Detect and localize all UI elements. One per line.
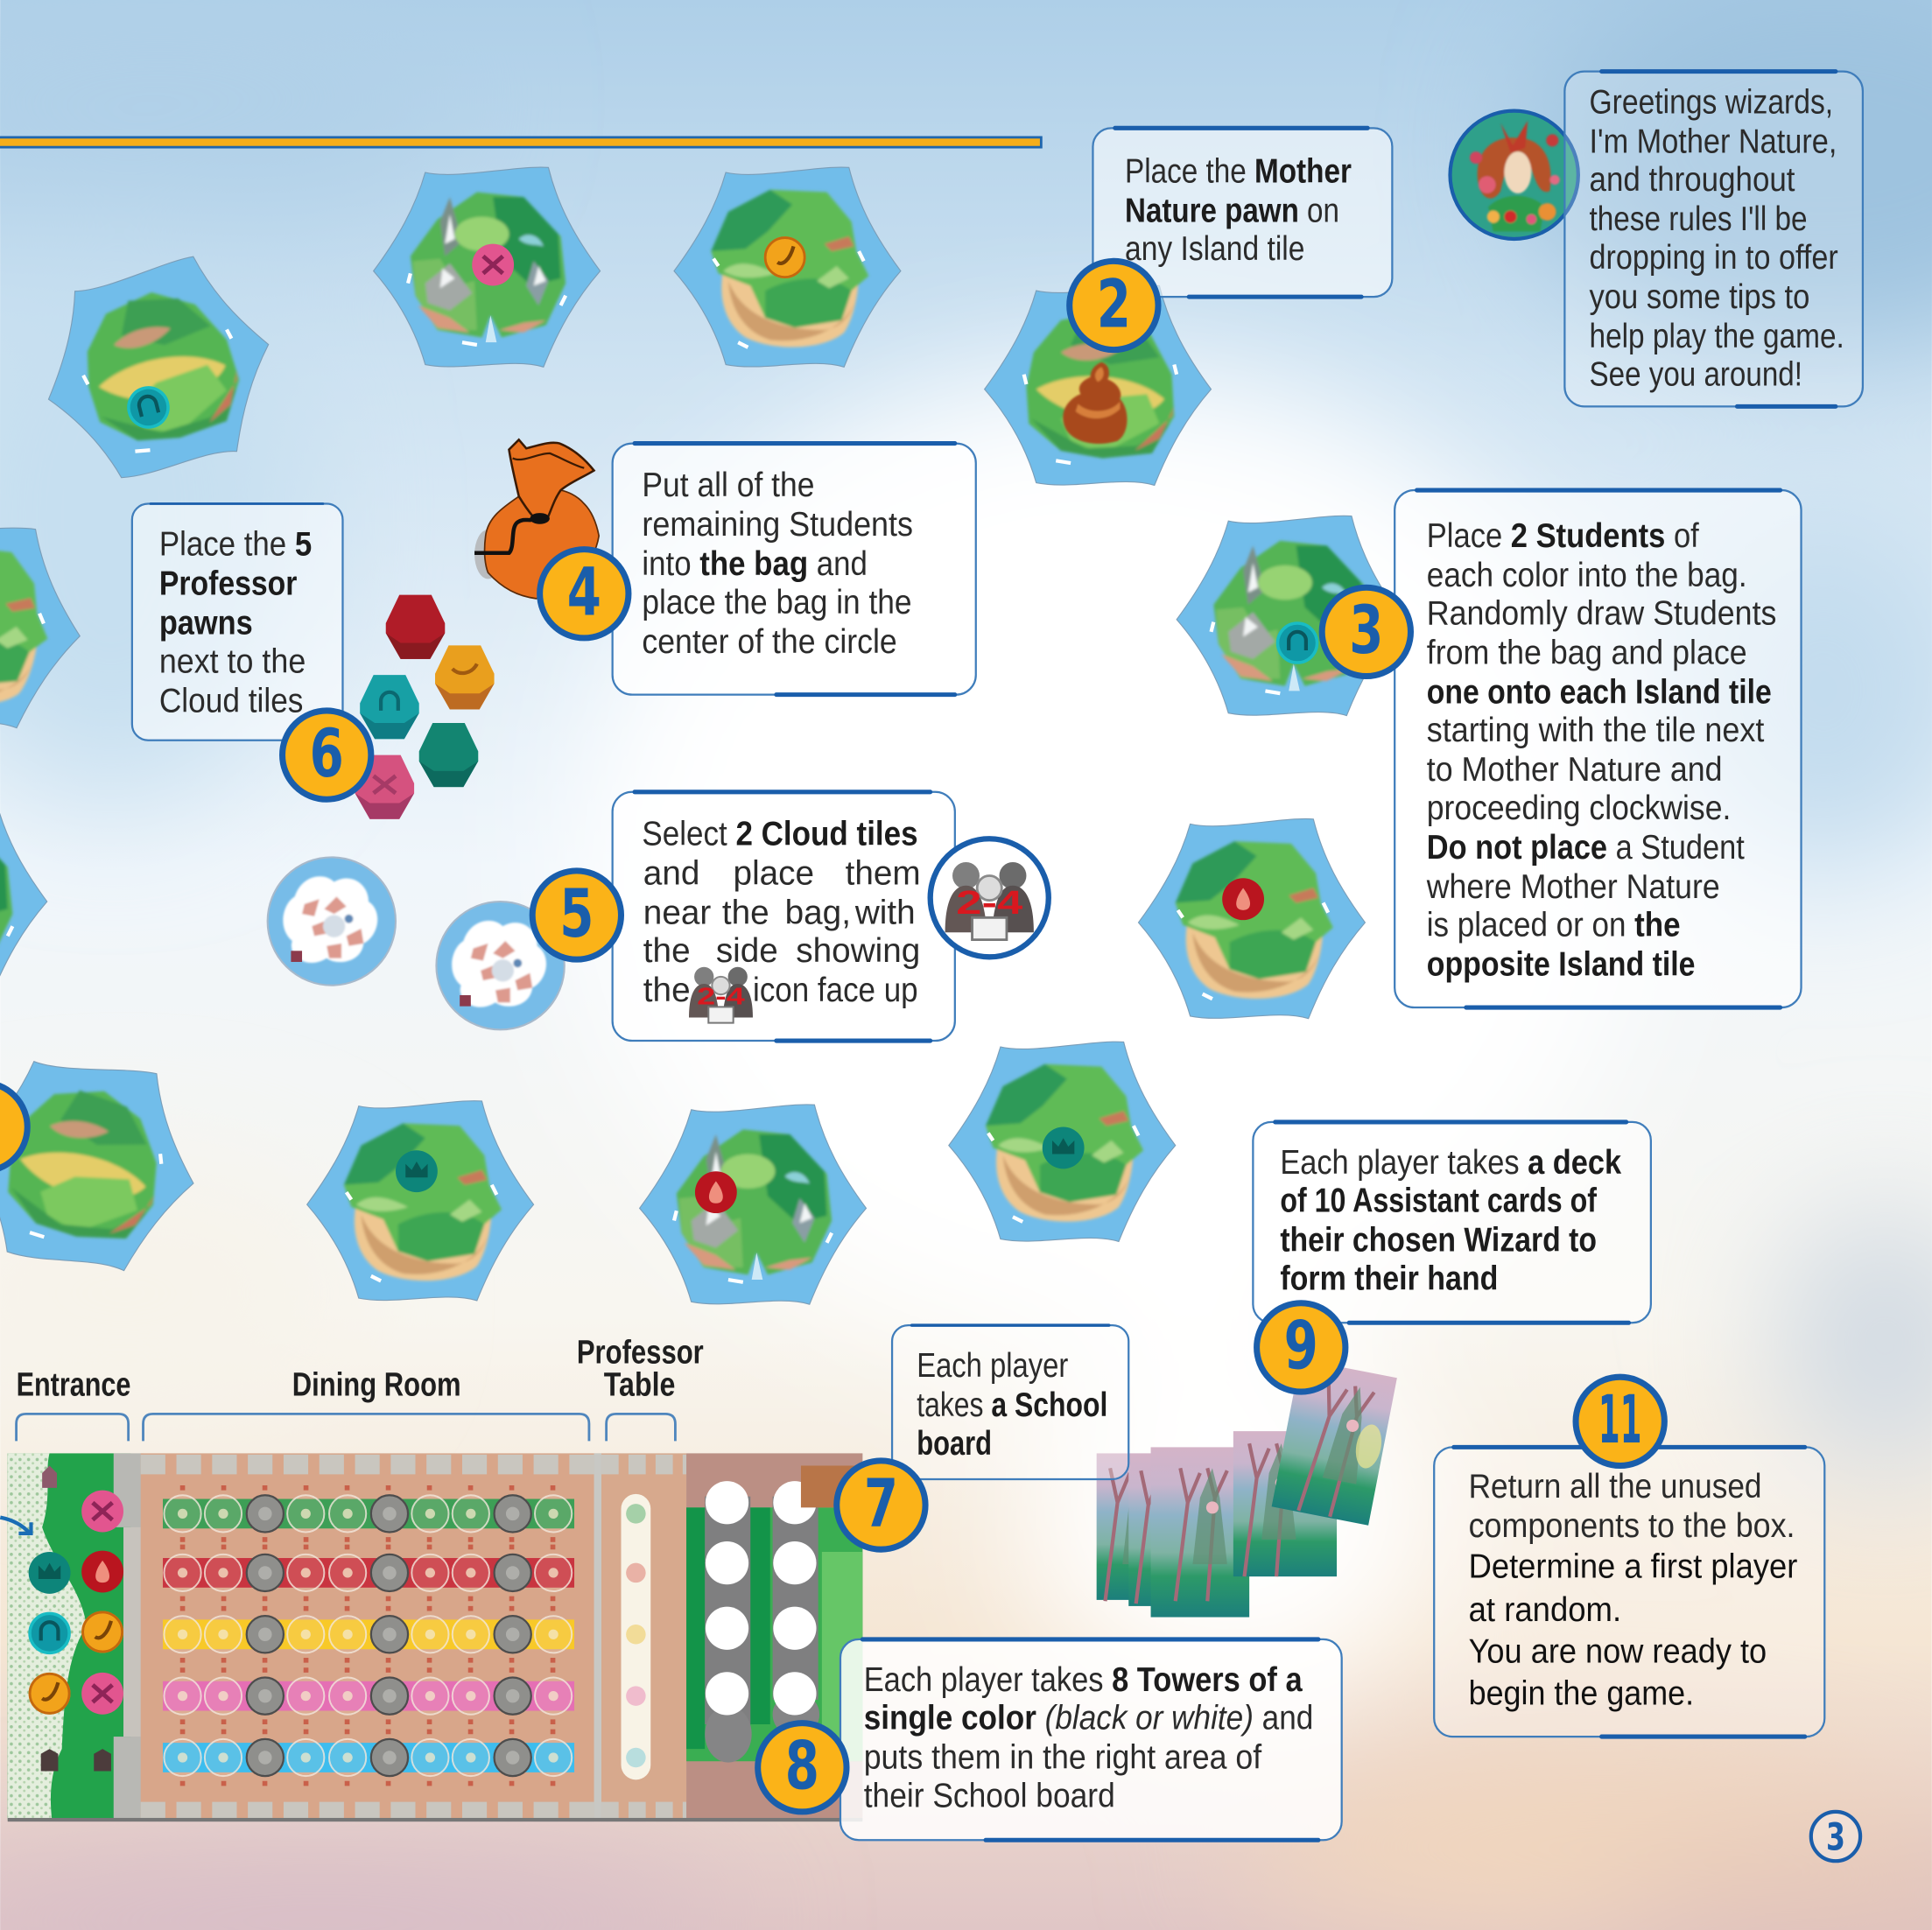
page number (1811, 1812, 1860, 1861)
professor pawns (355, 595, 495, 819)
board: Professor Table (594, 1453, 686, 1821)
callout: step 2: any Island tile (1125, 230, 1304, 268)
step badge: 7 (837, 1461, 925, 1549)
icon: Mother Nature pawn (1063, 362, 1128, 444)
callout: step 3: one onto each Island tile (1427, 673, 1772, 711)
step badge: 7: 7 (864, 1464, 898, 1542)
callout: step 3: starting with the tile next (1427, 712, 1765, 749)
board section labels (17, 1335, 704, 1403)
label: Professor Table: Table (604, 1366, 675, 1403)
callout: Mother Nature greeting: Greetings wizards, (1590, 83, 1833, 121)
island tile: red student, bottom (640, 1105, 867, 1304)
callout: step 5: them (846, 854, 921, 892)
portrait: Mother Nature (1451, 111, 1578, 239)
callout: step 5: the (643, 972, 691, 1009)
island tile: teal student, step 3 (1177, 516, 1403, 716)
callout: step 5: near (643, 894, 711, 931)
callout: Mother Nature greeting: See you around! (1590, 355, 1802, 393)
island tile: partial at left edge upper (0, 516, 88, 732)
callout: step 7: board (917, 1425, 992, 1463)
pawn: red (386, 595, 445, 659)
callout: Mother Nature greeting: help play the game. (1590, 318, 1844, 355)
callout: step 4: center of the circle (642, 623, 897, 661)
callout: step 4: place the bag in the (642, 584, 912, 621)
callout: step 5: side (716, 932, 778, 970)
callout: step 5: icon face up (753, 972, 918, 1009)
step badge: 4 (540, 550, 629, 638)
step badge: 2: 2 (1097, 265, 1131, 342)
pawn: orange (435, 645, 495, 710)
white towers (706, 1481, 817, 1715)
step badge: 6: 6 (310, 714, 344, 792)
callout: step 8: puts them in the right area of (864, 1739, 1261, 1777)
callout: step 4: remaining Students (642, 506, 913, 544)
callout: step 9: Each player takes a deck (1280, 1144, 1622, 1182)
step badge: 9: 9 (1284, 1307, 1318, 1385)
callout: step 3 (1395, 490, 1802, 1007)
callout: step 6: Place the 5 (159, 526, 312, 564)
step badge: 11 (1576, 1377, 1664, 1466)
callout: step 11 (1434, 1447, 1824, 1737)
callout: Mother Nature greeting: dropping in to offer (1590, 239, 1838, 277)
cloud tile: right (436, 902, 565, 1029)
callout: step 6: pawns (159, 605, 253, 642)
decorative title rule (0, 136, 1043, 149)
callout: step 11: You are now ready to (1469, 1633, 1767, 1671)
label: Dining Room: Dining Room (292, 1366, 461, 1403)
step badge: 8: 8 (785, 1727, 819, 1805)
callout: step 3: is placed or on the (1427, 906, 1681, 944)
callout: step 4: into the bag and (642, 545, 868, 583)
callout: step 5: with (854, 894, 916, 931)
callout: step 7: takes a School (917, 1386, 1107, 1424)
callout: step 3: where Mother Nature (1426, 868, 1720, 906)
callout: step 5: bag, (785, 894, 851, 931)
icon: student bag (474, 439, 599, 599)
callout: step 9 (1253, 1122, 1651, 1323)
arrow into entrance (0, 1518, 31, 1533)
island tile: red student (1139, 818, 1365, 1019)
callout: Mother Nature greeting: you some tips to (1590, 278, 1809, 316)
Assistant cards (1097, 1359, 1397, 1618)
island tile: teal student (24, 244, 292, 493)
island tile with Mother Nature pawn (985, 285, 1212, 485)
callout: step 6: next to the (159, 642, 306, 680)
callout: step 9: form their hand (1280, 1260, 1498, 1297)
callout: step 5: Select 2 Cloud tiles (642, 815, 918, 853)
island tile: pink student (374, 167, 601, 367)
step badge: 9 (1257, 1303, 1345, 1392)
icon: 2-4 players (931, 839, 1049, 957)
callout: Mother Nature greeting: these rules I'll be (1590, 200, 1808, 238)
step badge: 5 (532, 871, 621, 959)
callout: step 11: begin the game. (1469, 1674, 1694, 1712)
cloud tile: left (268, 857, 396, 986)
pawn: teal (360, 675, 419, 739)
board: Tower area (686, 1453, 862, 1821)
token (81, 1491, 123, 1532)
callout: step 6: Cloud tiles (159, 682, 303, 719)
callout: step 8: single color (black or white) and (864, 1700, 1313, 1737)
callout: step 3: opposite Island tile (1427, 945, 1696, 983)
callout: step 4: Put all of the (642, 467, 814, 504)
callout: step 2: Nature pawn on (1125, 192, 1339, 229)
callout: step 8: their School board (864, 1777, 1115, 1814)
callout: step 7: Each player (917, 1347, 1068, 1385)
step badge: 5: 5 (559, 874, 594, 952)
callout: step 2: Place the Mother (1125, 152, 1352, 190)
callout: Mother Nature greeting: I'm Mother Nature, (1590, 123, 1837, 160)
callout: step 3: proceeding clockwise. (1427, 790, 1731, 827)
callout: step 5: the (722, 894, 769, 931)
callout: step 11: components to the box. (1469, 1507, 1795, 1545)
School board (0, 1453, 862, 1821)
island tile: bottom left (0, 1049, 207, 1279)
callout: step 6: Professor (159, 565, 297, 603)
callout: step 3: Do not place a Student (1427, 829, 1745, 867)
callout: step 11: at random. (1469, 1591, 1621, 1629)
island tile: partial at left edge lower (0, 798, 47, 998)
step badge: 1 partial (0, 1083, 27, 1171)
step badge: 2 (1070, 261, 1158, 350)
callout: step 5: showing (796, 932, 920, 970)
callout: step 3: Randomly draw Students (1427, 594, 1776, 632)
callout: step 9: of 10 Assistant cards of (1280, 1183, 1597, 1220)
callout: step 2 (1092, 128, 1392, 297)
callout: step 3: each color into the bag. (1427, 557, 1747, 594)
board: Entrance (8, 1453, 144, 1821)
callout: step 9: their chosen Wizard to (1280, 1222, 1597, 1260)
callout: step 3: Place 2 Students of (1427, 517, 1699, 555)
callout: Mother Nature greeting (1564, 72, 1863, 406)
callout: step 5 (613, 792, 955, 1041)
callout: step 5: the (643, 932, 691, 970)
step badge: 6 (283, 711, 371, 799)
step badge: 11: 11 (1598, 1381, 1641, 1458)
callout: step 3: from the bag and place (1427, 634, 1747, 671)
callout: step 5: place (734, 854, 814, 892)
callout: step 11: Determine a first player (1469, 1548, 1797, 1586)
callout: step 3: to Mother Nature and (1427, 751, 1722, 789)
callout: step 8 (840, 1639, 1342, 1840)
icon: 2-4 players inline (689, 967, 753, 1023)
page number: 3 (1826, 1814, 1845, 1858)
callout: step 6 (132, 504, 342, 740)
island tile: green student, right (949, 1042, 1176, 1241)
pawn: green (419, 723, 478, 787)
board: Dining Room (141, 1453, 594, 1821)
label: Professor Table (577, 1335, 704, 1403)
callout: step 7 (892, 1325, 1128, 1479)
pawn: pink (355, 755, 414, 819)
label: Entrance: Entrance (17, 1366, 130, 1403)
step badge: 3 (1322, 587, 1410, 677)
board section brackets (17, 1414, 675, 1441)
callout: step 5: and (643, 854, 699, 892)
island tile: orange student (674, 167, 901, 367)
label: Professor Table: Professor (577, 1335, 704, 1372)
callout: step 4 (613, 444, 976, 695)
step badge: 3: 3 (1349, 592, 1383, 669)
callout: step 8: Each player takes 8 Towers of a (864, 1661, 1303, 1699)
callout: step 11: Return all the unused (1469, 1468, 1762, 1505)
island tile: green student, bottom (307, 1101, 534, 1301)
callout: Mother Nature greeting: and throughout (1590, 161, 1795, 199)
step badge: 8 (758, 1723, 847, 1812)
step badge: 4: 4 (567, 553, 601, 631)
